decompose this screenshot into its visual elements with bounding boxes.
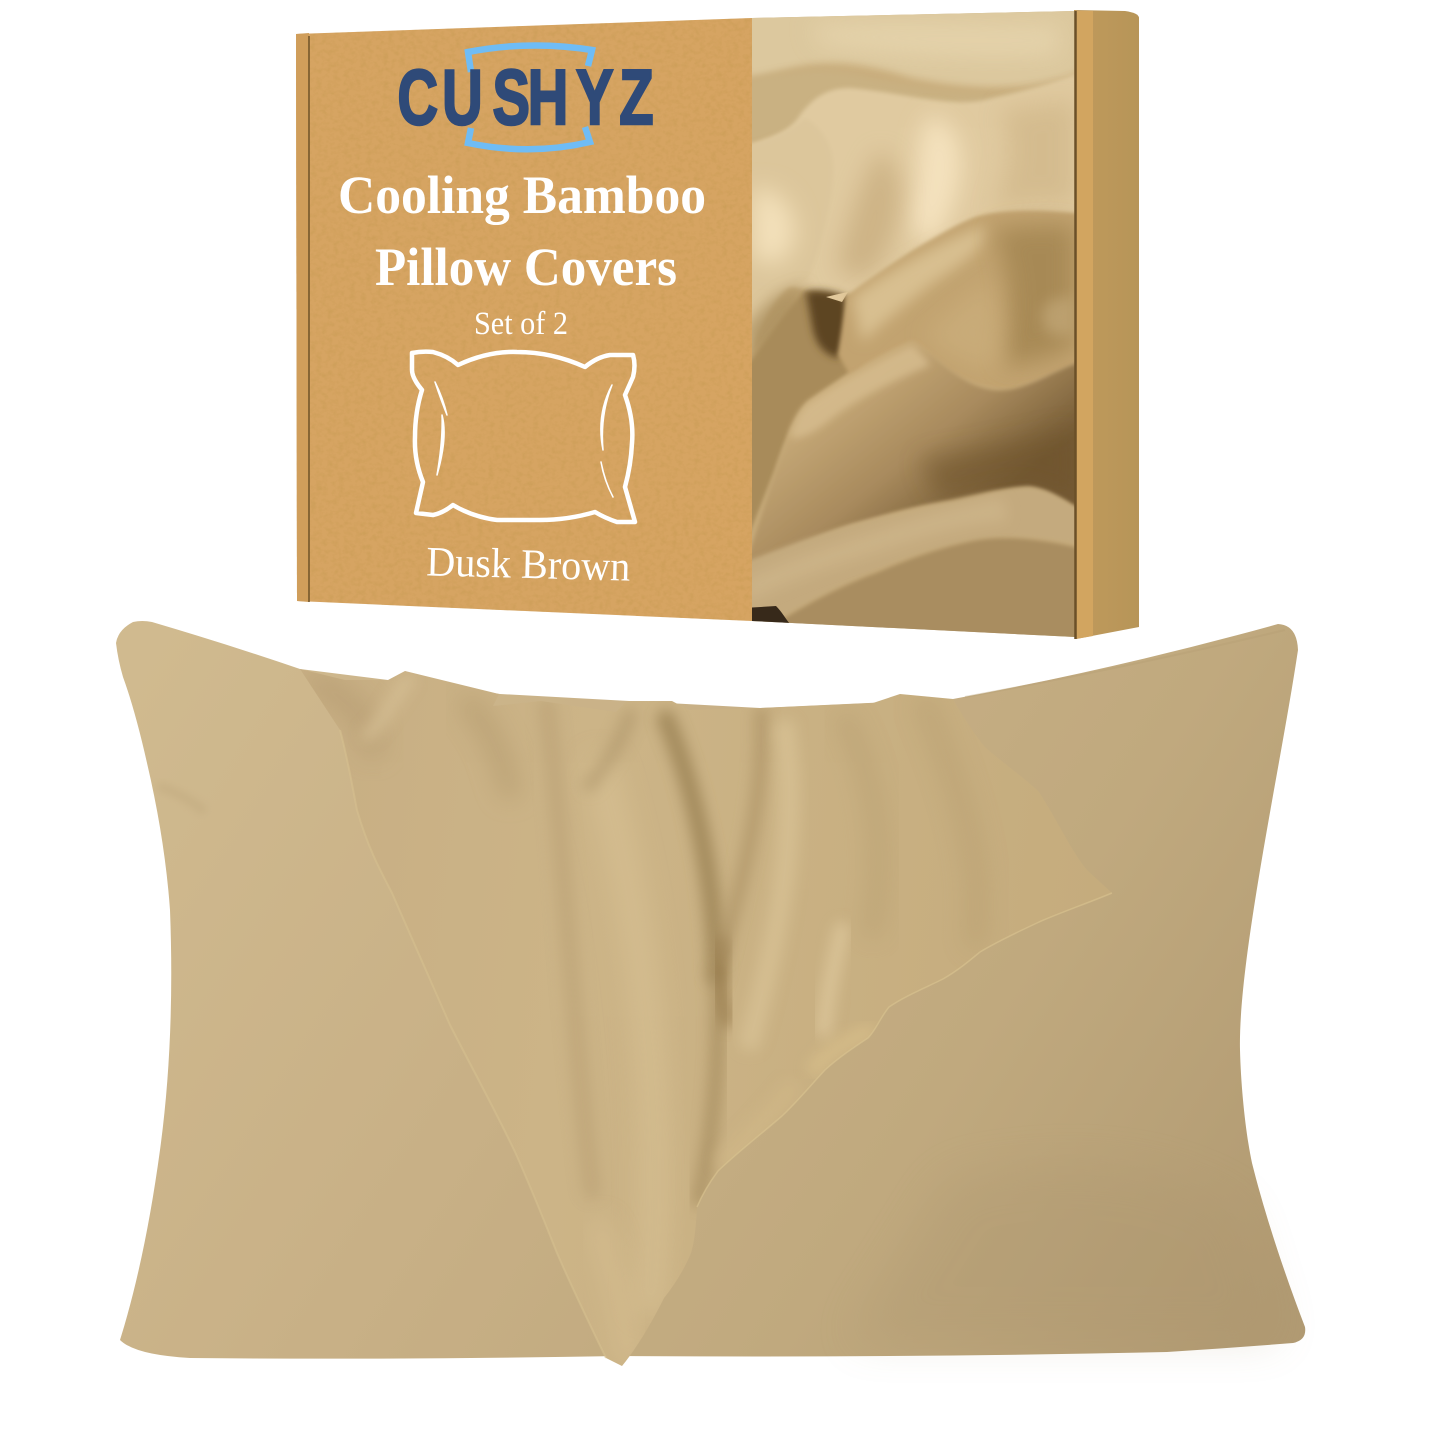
right drape crease [722,712,761,955]
deep shadow [806,290,849,358]
shaded upper left fold [320,682,368,728]
lower right pillow shade [850,1165,1280,1340]
satin lower edge [815,1032,868,1068]
box title: Cooling Bamboo [338,165,706,225]
soft highlight [824,930,842,1030]
upper ridge [745,72,1080,300]
lower main fold [752,352,1074,560]
pillow [116,621,1305,1366]
lower drape crease [699,975,718,1200]
lit hem tip [600,1230,628,1355]
draped flap [300,669,1112,1366]
lit centre band [600,770,654,1300]
set label: Set of 2 [474,306,568,342]
left drape crease [547,706,592,1190]
bottom folds [752,484,1074,622]
product box [296,0,1139,640]
box title: Pillow Covers [375,237,677,297]
box title [338,165,706,297]
left fold [752,286,788,346]
pillow crease [158,786,205,812]
flap edge [340,730,606,1358]
right drape highlight [750,730,789,1040]
fold shadow area [752,290,849,530]
logo: CUSHYZ [397,54,654,141]
band below top [745,70,1080,146]
main dark crease [666,719,716,975]
fabric photo [745,0,1080,640]
middle ridge [838,211,1080,389]
side fold line [1074,11,1077,639]
centre crease pocket [720,945,728,1020]
color label: Dusk Brown [426,539,631,591]
right shaded folds [845,720,879,930]
top band [752,11,1074,90]
box front [296,18,752,621]
icon: pillow [412,352,635,522]
pillow body [116,621,1305,1359]
lit ridge [368,680,408,735]
top hem seam [965,630,1285,697]
box side panel [1074,10,1139,639]
product scene [116,10,1306,1366]
